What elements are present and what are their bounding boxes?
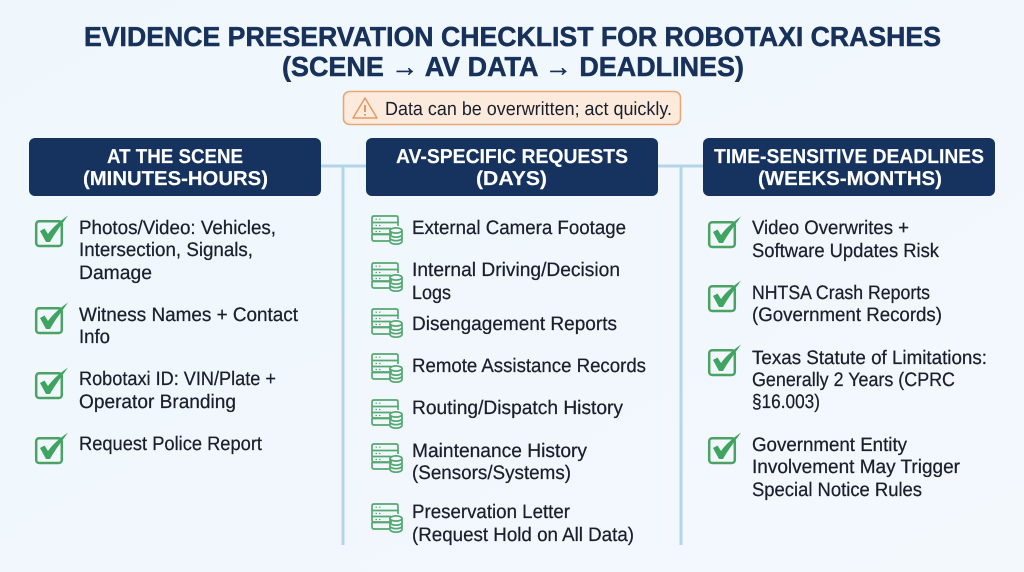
- item: texas statute of limitations: [709, 344, 987, 413]
- panel: av-specific requests: [366, 138, 658, 546]
- item: video overwrites: [709, 216, 939, 262]
- item: police report: Request Police Report: [79, 433, 263, 455]
- item: remote assistance records: [372, 354, 646, 382]
- item: witness names: Witness Names + Contact: [79, 304, 299, 326]
- item: photos and video: [36, 216, 276, 284]
- panel: at the scene: [29, 138, 321, 463]
- item: remote assistance records: Remote Assistance Records: [412, 355, 646, 377]
- item: preservation letter: [372, 501, 634, 546]
- item: photos and video: Photos/Video: Vehicles,: [79, 217, 276, 239]
- item: maintenance history: (Sensors/Systems): [412, 462, 571, 484]
- callout: data warning: [344, 92, 680, 124]
- item: government entity involvement: Government Entity: [752, 434, 907, 456]
- item: nhtsa crash reports: [709, 280, 942, 326]
- item: preservation letter: (Request Hold on All Data): [412, 524, 634, 546]
- item: photos and video: Intersection, Signals,: [79, 239, 253, 261]
- item: nhtsa crash reports: NHTSA Crash Reports: [752, 282, 930, 304]
- item: preservation letter: Preservation Letter: [412, 501, 570, 523]
- callout text: Data can be overwritten; act quickly.: [385, 99, 672, 120]
- heading: av-specific requests: AV-SPECIFIC REQUESTS: [396, 146, 628, 168]
- item: internal logs: Logs: [412, 282, 451, 304]
- heading: av-specific requests: (DAYS): [476, 168, 547, 190]
- item: maintenance history: [372, 440, 587, 484]
- item: witness names: [36, 302, 299, 348]
- heading: at the scene: [29, 138, 321, 196]
- item: video overwrites: Video Overwrites +: [752, 217, 909, 239]
- item: texas statute of limitations: Texas Statute of Limitations:: [752, 347, 987, 369]
- heading: av-specific requests: [366, 138, 658, 196]
- item: robotaxi id: Robotaxi ID: VIN/Plate +: [79, 368, 276, 390]
- heading: at the scene: AT THE SCENE: [107, 146, 243, 168]
- item: external camera footage: External Camera Footage: [412, 217, 626, 239]
- item: robotaxi id: Operator Branding: [79, 391, 236, 413]
- item: government entity involvement: [709, 432, 960, 501]
- item: nhtsa crash reports: (Government Records): [752, 304, 942, 326]
- heading: time-sensitive deadlines: [703, 138, 995, 196]
- connector lines between columns: [321, 166, 703, 545]
- item: external camera footage: [372, 216, 626, 244]
- title: (SCENE → AV DATA → DEADLINES): [282, 51, 744, 82]
- item: video overwrites: Software Updates Risk: [752, 240, 939, 262]
- panel: time-sensitive deadlines: [703, 138, 995, 501]
- item: texas statute of limitations: §16.003): [752, 391, 820, 413]
- icon: warning triangle: [353, 98, 377, 118]
- item: texas statute of limitations: Generally 2 Years (CPRC: [752, 369, 955, 391]
- item: robotaxi id: [36, 368, 276, 413]
- item: internal logs: [372, 259, 620, 304]
- item: maintenance history: Maintenance History: [412, 440, 587, 462]
- item: internal logs: Internal Driving/Decision: [412, 259, 620, 281]
- item: government entity involvement: Involvement May Trigger: [752, 456, 960, 478]
- item: routing and dispatch history: Routing/Dispatch History: [412, 397, 623, 419]
- item: police report: [36, 432, 263, 463]
- title: [84, 21, 941, 82]
- item: routing and dispatch history: [372, 397, 623, 428]
- heading: time-sensitive deadlines: (WEEKS-MONTHS): [758, 168, 942, 190]
- item: government entity involvement: Special Notice Rules: [752, 479, 922, 501]
- heading: at the scene: (MINUTES-HOURS): [83, 168, 268, 190]
- item: disengagement reports: [372, 309, 617, 337]
- item: witness names: Info: [79, 326, 110, 348]
- item: photos and video: Damage: [79, 262, 152, 284]
- item: disengagement reports: Disengagement Reports: [412, 313, 617, 335]
- heading: time-sensitive deadlines: TIME-SENSITIVE DEADLINES: [714, 146, 984, 168]
- title: EVIDENCE PRESERVATION CHECKLIST FOR ROBOTAXI CRASHES: [84, 21, 941, 52]
